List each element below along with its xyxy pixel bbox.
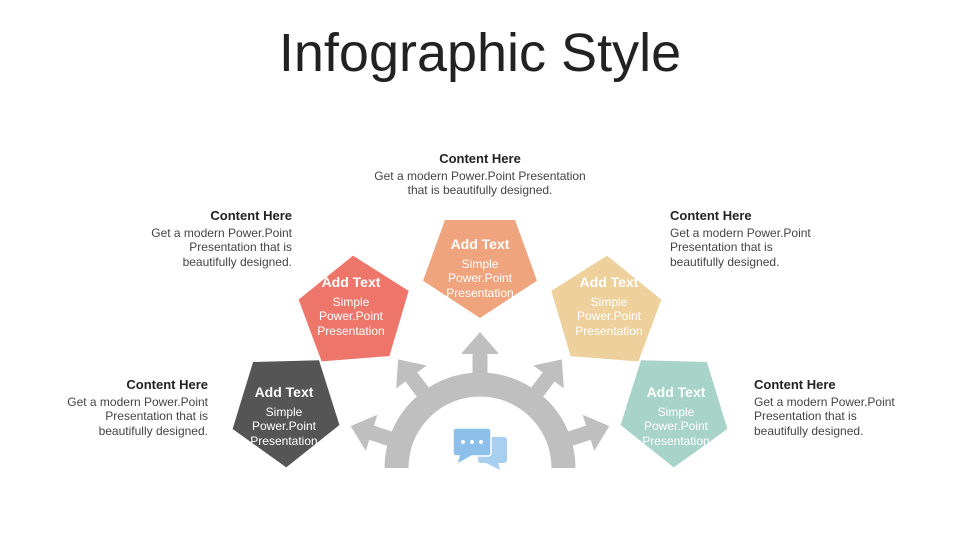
pentagon text: tan: Presentation [575, 324, 643, 338]
text block: upper left: Presentation that is [189, 240, 292, 254]
pentagon text: red [317, 274, 385, 338]
text block: upper left: Get a modern Power.Point [151, 226, 292, 240]
title: Infographic Style [279, 23, 681, 83]
icon: chat bubbles [453, 428, 507, 470]
arch [396, 385, 564, 468]
text block: upper right [670, 208, 811, 268]
text block: top center [374, 151, 586, 197]
pentagon text: tan [575, 274, 643, 338]
pentagon: red [282, 242, 433, 391]
pentagon text: teal: Simple [658, 404, 694, 418]
text block: lower right: beautifully designed. [754, 424, 863, 438]
text block: upper right: Get a modern Power.Point [670, 226, 811, 240]
text block: lower right: Content Here [754, 377, 836, 392]
text block: top center: Get a modern Power.Point Presentation [374, 168, 586, 182]
text block: upper left: Content Here [210, 208, 292, 223]
text block: lower right [754, 377, 895, 438]
pentagon text: teal [642, 384, 710, 448]
text block: top center: Content Here [439, 151, 521, 166]
pentagon text: orange [446, 236, 514, 300]
pentagon text: dark: Simple [266, 404, 302, 418]
pentagon text: tan: Power.Point [577, 309, 641, 323]
arrows [345, 332, 615, 459]
pentagon text: red: Presentation [317, 324, 385, 338]
pentagon: orange [423, 220, 537, 318]
pentagon: dark [226, 342, 356, 479]
pentagon text: teal: Presentation [642, 434, 710, 448]
text block: upper right: Content Here [670, 208, 752, 223]
pentagon text: orange: Simple [462, 256, 498, 270]
pentagon: tan [527, 242, 678, 391]
text block: top center: that is beautifully designed. [408, 183, 552, 197]
pentagon text: red: Add Text [322, 274, 380, 290]
pentagon text: tan: Add Text [580, 274, 638, 290]
text block: lower left: Get a modern Power.Point [67, 394, 208, 408]
text block: lower left: beautifully designed. [99, 424, 208, 438]
pentagon: teal [604, 342, 734, 479]
pentagon text: teal: Power.Point [644, 419, 708, 433]
text block: upper right: beautifully designed. [670, 254, 779, 268]
pentagon text: dark: Power.Point [252, 419, 316, 433]
text block: lower right: Get a modern Power.Point [754, 394, 895, 408]
pentagon text: orange: Presentation [446, 286, 514, 300]
pentagon text: tan: Simple [591, 294, 627, 308]
pentagon text: red: Power.Point [319, 309, 383, 323]
pentagon text: orange: Add Text [451, 236, 509, 252]
text block: lower right: Presentation that is [754, 409, 857, 423]
pentagon text: dark: Presentation [250, 434, 318, 448]
text block: upper left [151, 208, 292, 268]
text block: lower left [67, 377, 208, 438]
text block: upper left: beautifully designed. [183, 254, 292, 268]
text block: lower left: Presentation that is [105, 409, 208, 423]
pentagon text: red: Simple [333, 294, 369, 308]
pentagon text: teal: Add Text [647, 384, 705, 400]
text block: lower left: Content Here [126, 377, 208, 392]
pentagon text: dark [250, 384, 318, 448]
text block: upper right: Presentation that is [670, 240, 773, 254]
pentagon text: dark: Add Text [255, 384, 313, 400]
pentagon text: orange: Power.Point [448, 271, 512, 285]
